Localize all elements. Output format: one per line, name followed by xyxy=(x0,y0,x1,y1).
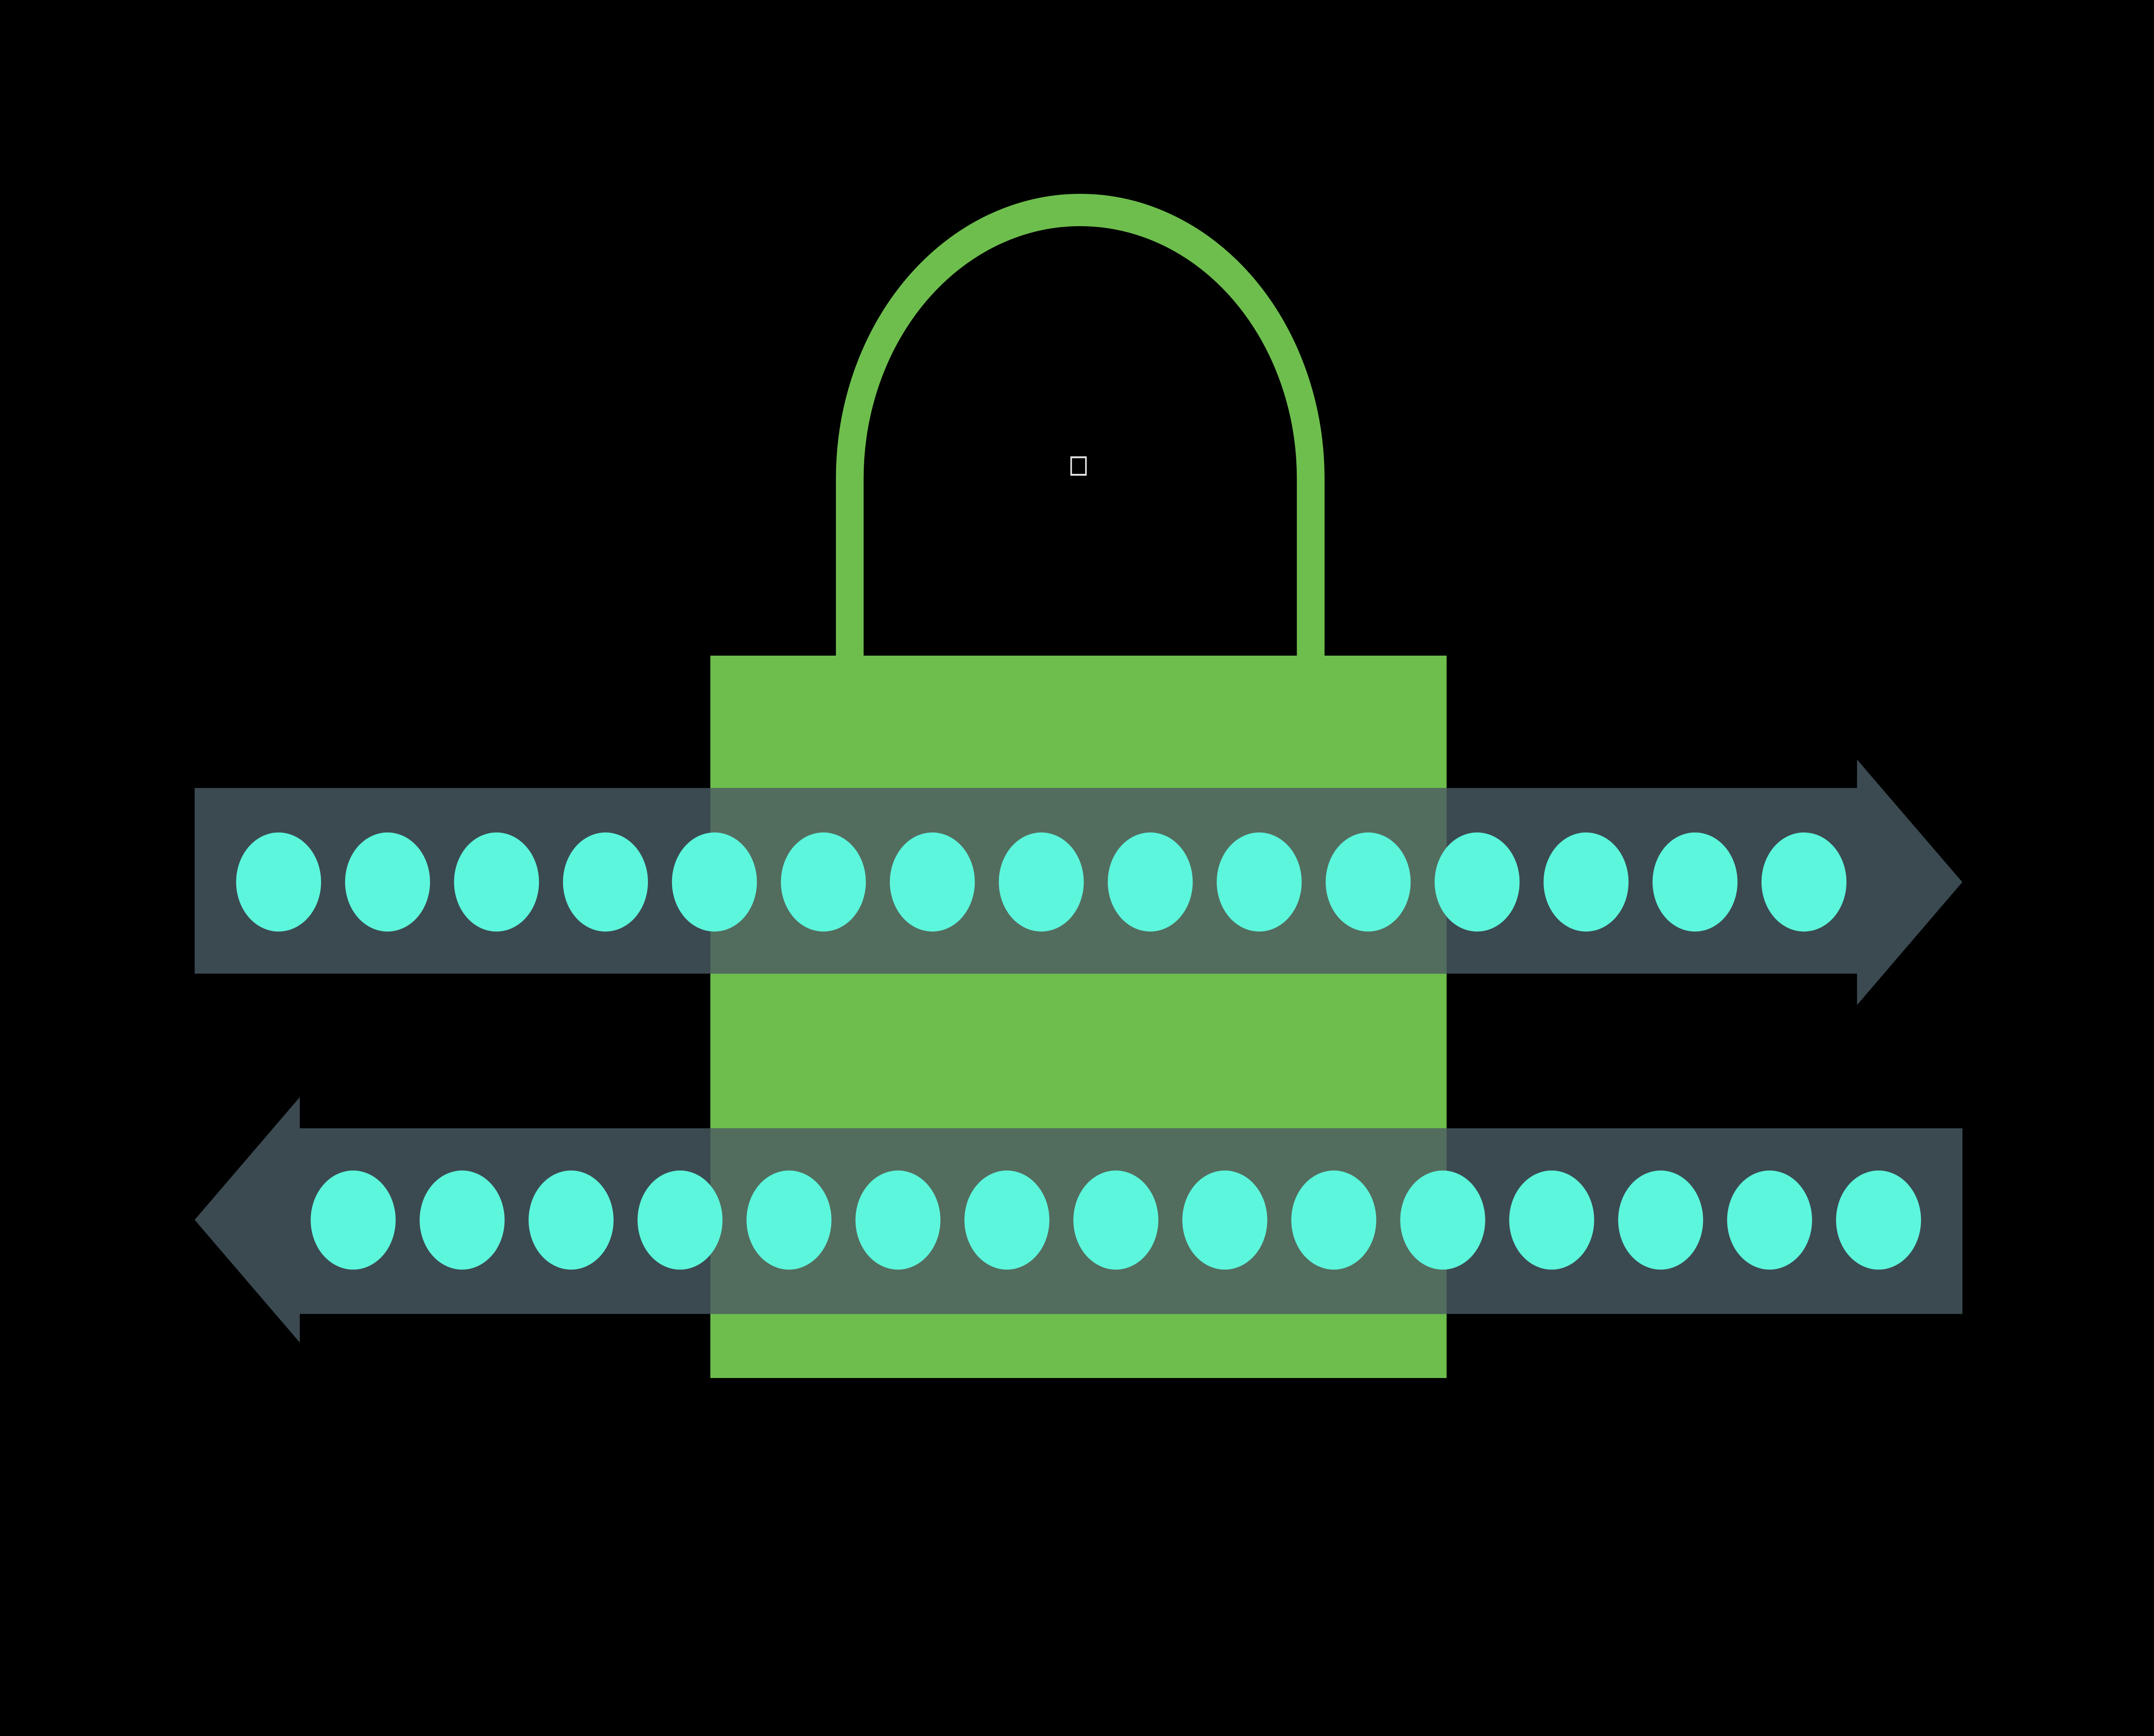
left arrow data dots xyxy=(311,1170,1921,1269)
arrow: leftward data flow xyxy=(195,1097,1962,1343)
right arrow overlap with lock xyxy=(710,788,1447,974)
padlock shackle xyxy=(850,210,1310,659)
arrow: rightward data flow xyxy=(195,759,1962,1005)
right arrow data dots xyxy=(236,832,1846,931)
icon: padlock xyxy=(710,210,1447,1378)
padlock body xyxy=(710,656,1447,1378)
small keyhole square xyxy=(1071,457,1086,475)
left arrow shape xyxy=(195,1097,1962,1343)
left arrow overlap with lock xyxy=(710,1128,1447,1314)
right arrow shape xyxy=(195,759,1962,1005)
